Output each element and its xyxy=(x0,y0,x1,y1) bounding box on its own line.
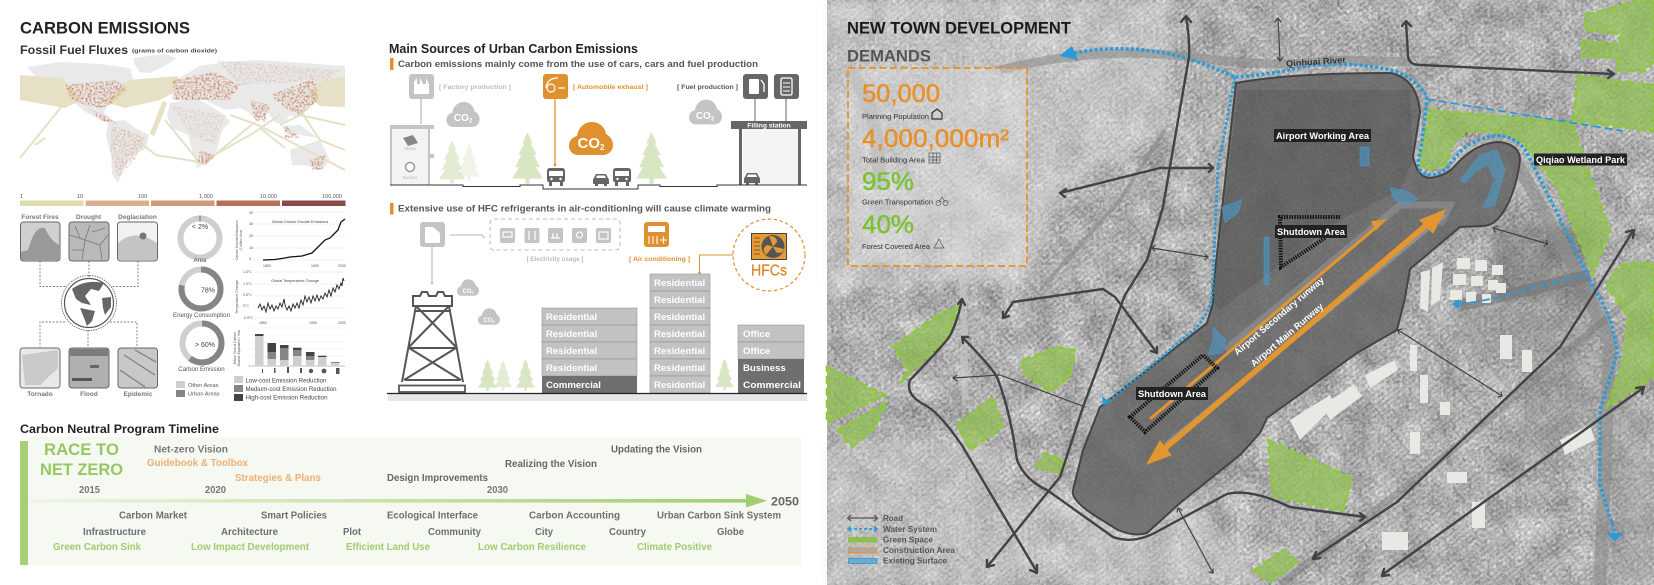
filling station: Filling station xyxy=(747,122,791,130)
stacked bar chart: emission reduction xyxy=(233,328,345,374)
legend: areas xyxy=(176,381,220,398)
line chart: global carbon dioxide emissions: Carbon Dioxide Emissions xyxy=(235,220,239,260)
stat: green transportation xyxy=(862,168,948,206)
race to net zero xyxy=(40,440,123,479)
green spaces xyxy=(827,0,1654,582)
lower milestones: Architecture xyxy=(221,527,278,538)
map legend xyxy=(848,514,956,566)
main runway arrow xyxy=(1147,210,1445,464)
heading: fossil fuel fluxes: (grams of carbon dioxide) xyxy=(132,48,217,54)
existing water surfaces xyxy=(1208,147,1505,355)
stat: planning population xyxy=(862,80,942,121)
line chart: global temperature change: 1.0°C xyxy=(243,282,252,286)
line chart: global carbon dioxide emissions: 1950 xyxy=(311,264,319,268)
cloud: fuel co2: 2 xyxy=(711,116,715,122)
arrow: timeline to 2050 xyxy=(29,494,767,508)
electricity usage xyxy=(490,219,620,263)
building: office and business xyxy=(738,325,804,393)
upper milestones: Design Improvements xyxy=(387,473,488,484)
line chart: global carbon dioxide emissions: 0 xyxy=(249,257,251,261)
small sector icons xyxy=(262,367,340,374)
impact: forest fires: Forest Fires xyxy=(21,214,59,221)
cloud: automobile co2: 2 xyxy=(600,143,605,152)
cloud: factory co2: CO xyxy=(454,113,469,124)
legend: areas: Urban Areas xyxy=(188,392,220,398)
year 2050: 2050 xyxy=(771,494,799,508)
heading: fossil fuel fluxes xyxy=(20,43,217,57)
race to net zero: RACE TO xyxy=(44,440,119,459)
upper milestones: 2030 xyxy=(487,485,508,496)
stat: planning population: Planning Population xyxy=(862,112,929,121)
legend: emission reduction cost: High-cost Emission Reduction xyxy=(246,394,328,402)
building: office and business: Office xyxy=(743,346,770,357)
cloud: fuel co2 xyxy=(689,100,722,124)
upper milestones: Updating the Vision xyxy=(611,444,702,456)
building: residential tower: Residential xyxy=(654,295,705,306)
cloud: factory co2: 2 xyxy=(469,118,473,124)
impact: drought: Drought xyxy=(76,214,102,221)
filling station xyxy=(731,121,807,185)
legend: areas: Other Areas xyxy=(188,383,219,389)
hfcs callout: HFCs xyxy=(751,262,787,280)
upper milestones xyxy=(79,444,702,496)
lower milestones: City xyxy=(535,527,553,538)
stat: planning population: 50,000 xyxy=(862,80,940,108)
factory: Metal xyxy=(404,146,416,151)
building: office and business: Office xyxy=(743,329,770,340)
legend: flux colour scale: 100 xyxy=(138,194,147,200)
urban share donut charts xyxy=(173,216,230,398)
legend: emission reduction cost xyxy=(234,376,337,402)
legend: road: Road xyxy=(883,514,903,523)
bars xyxy=(255,334,340,366)
aerial base map xyxy=(827,0,1654,585)
impact: forest fires xyxy=(20,214,60,261)
impact: tornado xyxy=(20,348,60,398)
stacked bar chart: emission reduction: Billion Tons of Carbon xyxy=(233,332,237,364)
donut: energy consumption: 78% xyxy=(201,288,215,294)
panel: carbon neutral program timeline xyxy=(20,422,801,565)
label: qinhuai river: Qinhuai River xyxy=(1286,54,1347,69)
line chart: global carbon dioxide emissions: Global Carbon Dioxide Emissions xyxy=(272,220,328,224)
hfc scene xyxy=(387,219,807,401)
title: CARBON EMISSIONS xyxy=(20,20,190,38)
stat: green transportation: Green Transportation xyxy=(862,198,933,206)
stat: total building area: Total Building Area xyxy=(862,156,926,164)
impact: deglaciation: Deglaciation xyxy=(118,214,157,221)
fuel production xyxy=(677,74,799,121)
lower milestones: Community xyxy=(428,527,481,538)
power plant icon and line xyxy=(420,222,485,284)
stat: total building area: 4,000,000m² xyxy=(862,125,1009,153)
building: residential and commercial: Residential xyxy=(546,329,597,340)
clouds: power plant co2: CO xyxy=(483,318,492,324)
airport construction area xyxy=(1073,73,1520,534)
lower milestones: Plot xyxy=(343,527,362,538)
legend: flux colour scale: 100,000 xyxy=(322,194,342,200)
donut: carbon emission: > 60% xyxy=(195,342,215,349)
building: residential tower: Residential xyxy=(654,363,705,374)
legend: green space: Green Space xyxy=(883,536,934,544)
upper milestones: 2020 xyxy=(205,485,226,496)
clouds: power plant co2: CO xyxy=(462,289,471,295)
panel: main sources of urban carbon emissions xyxy=(387,42,807,401)
lower milestones: Smart Policies xyxy=(261,510,327,522)
impact: flood xyxy=(69,348,109,398)
line chart: global carbon dioxide emissions: 40 xyxy=(249,211,253,215)
runways: Airport Secondary runway xyxy=(1232,274,1327,357)
green outcomes: Low Carbon Resilience xyxy=(478,542,586,553)
cloud: fuel co2: CO xyxy=(696,111,711,122)
green outcomes xyxy=(53,542,712,553)
stat: forest covered area xyxy=(862,211,944,251)
heading: demands: DEMANDS xyxy=(847,48,931,66)
line chart: global temperature change: Global Temperature Change xyxy=(271,279,319,283)
green outcomes: Climate Positive xyxy=(637,542,712,553)
cloud: factory co2 xyxy=(446,102,480,127)
building: office and business: Business xyxy=(743,363,786,374)
label: shutdown area south: Shutdown Area xyxy=(1138,389,1207,399)
line chart: global temperature change: Temperature Change xyxy=(235,280,239,314)
trees xyxy=(478,359,734,391)
runways: Airport Main Runway xyxy=(1249,301,1326,369)
donut: area: Area xyxy=(194,258,207,264)
climate impact diagram xyxy=(20,214,158,398)
impact: drought xyxy=(69,214,109,261)
upper milestones: Strategies & Plans xyxy=(235,473,321,484)
line chart: global temperature change: 1.5°C xyxy=(243,270,252,274)
line chart: global temperature change: 1950 xyxy=(309,321,317,325)
trees xyxy=(439,132,667,184)
building: residential tower: Residential xyxy=(654,380,705,391)
legend: flux colour scale: 10 xyxy=(77,194,83,200)
cloud: automobile co2 xyxy=(569,122,613,155)
building: residential tower xyxy=(650,274,710,393)
building: office and business: Commercial xyxy=(743,380,801,391)
green outcomes: Low Impact Development xyxy=(191,542,310,553)
panel: carbon emissions xyxy=(20,20,346,402)
green outcomes: Efficient Land Use xyxy=(346,542,430,553)
clouds: power plant co2: 2 xyxy=(492,319,495,324)
legend: existing surface: Existing Surface xyxy=(883,556,948,566)
legend: water system: Water System xyxy=(883,525,937,534)
line chart: global temperature change: -0.5°C xyxy=(243,316,253,320)
building: residential and commercial: Residential xyxy=(546,346,597,357)
line chart: global carbon dioxide emissions: 20 xyxy=(249,234,253,238)
map labels xyxy=(1136,129,1627,400)
lower milestones: Ecological Interface xyxy=(387,510,478,522)
runways xyxy=(1147,210,1445,464)
building: residential tower: Residential xyxy=(654,278,705,289)
building: residential tower: Residential xyxy=(654,346,705,357)
upper milestones: Guidebook & Toolbox xyxy=(147,458,248,469)
legend: flux colour scale: 10,000 xyxy=(260,194,277,200)
air conditioning icon: [ Air conditioning ] xyxy=(629,256,690,263)
building: residential and commercial: Commercial xyxy=(546,380,601,391)
street scene xyxy=(390,74,807,189)
building: residential tower: Residential xyxy=(654,329,705,340)
impact: epidemic xyxy=(118,348,158,398)
stat: forest covered area: 40% xyxy=(862,211,914,239)
clouds: power plant co2 xyxy=(457,279,500,325)
ground xyxy=(387,394,807,401)
factory: Rubber xyxy=(403,175,418,180)
electricity usage: [ Electricity usage ] xyxy=(527,256,583,263)
timeline background xyxy=(20,437,801,565)
subheading: hfc refrigerants: Extensive use of HFC refrigerants in air-conditioning will cause climate warming xyxy=(398,204,771,214)
building: residential and commercial: Residential xyxy=(546,312,597,323)
line chart: global carbon dioxide emissions: 10 xyxy=(249,246,253,250)
lower milestones: Carbon Market xyxy=(119,510,188,522)
road with vehicles xyxy=(390,164,807,189)
building: residential tower: Residential xyxy=(654,312,705,323)
secondary runway arrow xyxy=(1150,220,1385,419)
legend: flux colour scale xyxy=(20,194,346,206)
water system arrows xyxy=(1060,46,1624,541)
upper milestones: Realizing the Vision xyxy=(505,459,597,470)
impact: epidemic: Epidemic xyxy=(124,391,153,398)
building: residential and commercial xyxy=(542,308,637,393)
heading: main sources: Main Sources of Urban Carbon Emissions xyxy=(389,42,638,56)
air conditioning icon xyxy=(629,222,690,263)
line chart: global carbon dioxide emissions xyxy=(235,211,346,268)
stat: forest covered area: Forest Covered Area xyxy=(862,242,931,251)
lower milestones: Globe xyxy=(717,527,744,538)
label: airport working area: Airport Working Area xyxy=(1276,131,1370,141)
green outcomes: Green Carbon Sink xyxy=(53,542,141,553)
fuel production: [ Fuel production ] xyxy=(677,84,738,91)
stacked bar chart: emission reduction: Dioxide Equivalent / Year xyxy=(237,329,241,366)
line chart: global carbon dioxide emissions: 1850 xyxy=(263,264,271,268)
race to net zero: NET ZERO xyxy=(40,460,123,479)
line chart: global temperature change xyxy=(235,270,346,325)
stat: green transportation: 95% xyxy=(862,168,914,196)
legend: flux colour scale: 1 xyxy=(20,194,23,200)
lower milestones: Country xyxy=(609,527,646,538)
white industrial roofs xyxy=(1290,258,1595,550)
label: shutdown area north: Shutdown Area xyxy=(1277,227,1346,237)
heading: fossil fuel fluxes: Fossil Fuel Fluxes xyxy=(20,43,128,57)
lower milestones: Infrastructure xyxy=(83,527,146,538)
impact: deglaciation xyxy=(118,214,158,261)
shutdown area hatching xyxy=(1130,217,1340,432)
line chart: global temperature change: 1850 xyxy=(259,321,267,325)
impact: flood: Flood xyxy=(80,391,98,398)
factory: [ Factory production ] xyxy=(439,84,511,91)
line chart: global temperature change: 0.5°C xyxy=(243,293,252,297)
legend: construction area: Construction Area xyxy=(883,546,956,555)
legend: emission reduction cost: Low-cost Emission Reduction xyxy=(246,378,327,384)
legend: emission reduction cost: Medium-cost Emission Reduction xyxy=(246,386,337,393)
impact: tornado: Tornado xyxy=(27,391,53,398)
transmission tower xyxy=(399,292,465,392)
icon: globe xyxy=(62,276,116,330)
lower milestones: Urban Carbon Sink System xyxy=(657,510,781,522)
label: qiqiao wetland park: Qiqiao Wetland Park xyxy=(1536,155,1626,165)
lower milestones xyxy=(83,510,781,538)
clouds: power plant co2: 2 xyxy=(471,290,474,295)
lower milestones: Carbon Accounting xyxy=(529,510,620,522)
upper milestones: Net-zero Vision xyxy=(154,444,228,456)
building: residential and commercial: Residential xyxy=(546,363,597,374)
title: new town development: NEW TOWN DEVELOPMENT xyxy=(847,20,1071,38)
line chart: global carbon dioxide emissions: (1 billion tons) xyxy=(239,229,243,251)
cloud: automobile co2: CO xyxy=(578,135,600,152)
donut: area xyxy=(180,216,220,264)
legend: flux colour scale: 1,000 xyxy=(199,194,213,200)
panel: new town development map xyxy=(827,0,1654,585)
line chart: global carbon dioxide emissions: 30 xyxy=(249,222,253,226)
line chart: global temperature change: 0°C xyxy=(243,304,249,308)
donut: energy consumption: Energy Consumption xyxy=(173,312,230,319)
upper milestones: 2015 xyxy=(79,485,100,496)
icon: automobile exhaust xyxy=(543,74,648,165)
donut: carbon emission xyxy=(178,324,225,373)
demands box xyxy=(848,68,1027,266)
line chart: global temperature change: 2000 xyxy=(338,321,346,325)
hfcs callout xyxy=(698,219,805,291)
working area texture xyxy=(1213,90,1413,310)
stat: total building area xyxy=(862,125,1009,164)
factory xyxy=(390,74,511,185)
line chart: global carbon dioxide emissions: 2000 xyxy=(338,264,346,268)
donut: carbon emission: Carbon Emission xyxy=(178,366,225,373)
donut: area: < 2% xyxy=(192,224,208,231)
road network arrows xyxy=(909,16,1644,576)
heading: timeline: Carbon Neutral Program Timeline xyxy=(20,422,219,436)
donut: energy consumption xyxy=(173,270,230,319)
world map of fossil fuel fluxes xyxy=(20,54,345,183)
subheading: cars and fuel: Carbon emissions mainly come from the use of cars, cars and fuel production xyxy=(398,59,758,69)
icon: automobile exhaust: [ Automobile exhaust ] xyxy=(573,84,648,91)
